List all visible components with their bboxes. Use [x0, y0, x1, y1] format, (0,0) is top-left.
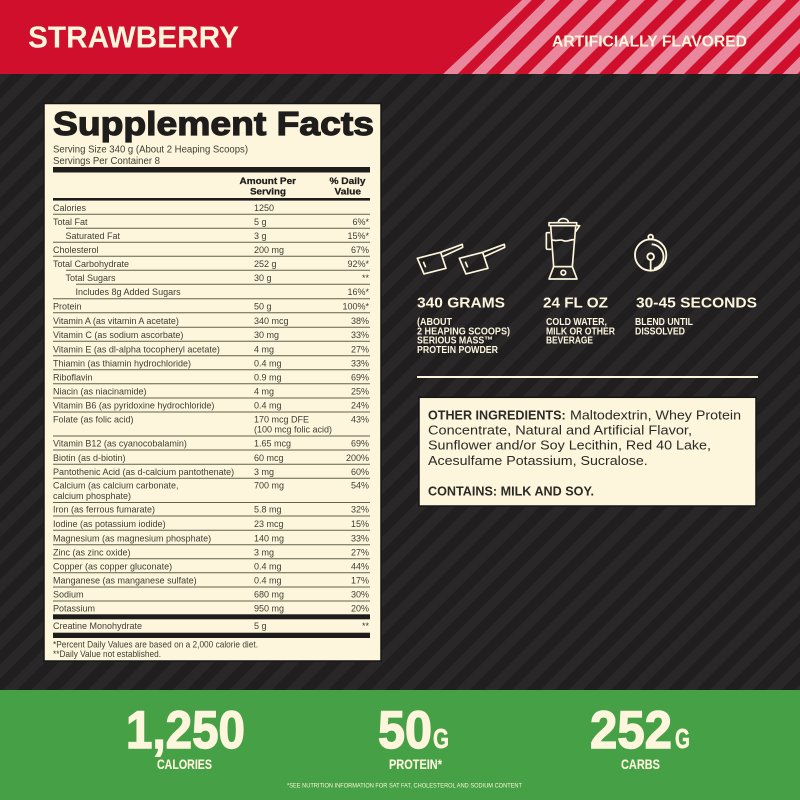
- column headers: % Daily: [330, 176, 366, 187]
- icon: timer: [635, 235, 666, 271]
- nutrient rows: 5 g: [254, 217, 267, 227]
- nutrient rows: Includes 8g Added Sugars: [76, 287, 181, 297]
- flavor name: STRAWBERRY: [28, 20, 239, 54]
- nutrient rows: Cholesterol: [53, 245, 99, 255]
- stat: calories: CALORIES: [157, 757, 212, 772]
- nutrient rows: 700 mg: [254, 481, 284, 491]
- column headers: Amount Per: [240, 176, 296, 187]
- footer band: [0, 690, 800, 800]
- nutrient rows: 0.4 mg: [254, 401, 282, 411]
- nutrient rows: 44%: [351, 561, 369, 571]
- nutrient rows: Total Fat: [53, 217, 88, 227]
- amount: liquid: 24 FL OZ: [543, 295, 608, 312]
- nutrient rows: Vitamin B6 (as pyridoxine hydrochloride): [53, 401, 214, 411]
- nutrient rows: 4 mg: [254, 387, 274, 397]
- thick rules: [53, 167, 370, 638]
- nutrient rows: 33%: [351, 533, 369, 543]
- nutrient rows: 25%: [351, 387, 369, 397]
- serving information: Serving Size 340 g (About 2 Heaping Scoops): [53, 145, 248, 156]
- nutrient rows: 950 mg: [254, 603, 284, 613]
- nutrient rows: 92%*: [347, 259, 369, 269]
- nutrient rows: Iodine (as potassium iodide): [53, 519, 166, 529]
- nutrient rows: calcium phosphate): [53, 491, 131, 501]
- nutrient rows: **: [362, 621, 369, 631]
- nutrient rows: Vitamin E (as dl-alpha tocopheryl acetate): [53, 344, 220, 354]
- amount: liquid: [543, 295, 616, 347]
- icon: two scoops: [417, 244, 505, 274]
- nutrient rows: Folate (as folic acid): [53, 414, 134, 424]
- ingredients text: Concentrate, Natural and Artificial Flavor,: [428, 423, 692, 437]
- nutrient rows: 23 mcg: [254, 519, 284, 529]
- nutrient rows: 340 mcg: [254, 316, 289, 326]
- nutrient rows: Protein: [53, 301, 82, 311]
- nutrient rows: 27%: [351, 344, 369, 354]
- ingredients text: Sunflower and/or Soy Lecithin, Red 40 Lake,: [428, 438, 711, 452]
- nutrient rows: 680 mg: [254, 590, 284, 600]
- stat: protein: [378, 701, 449, 772]
- nutrient rows: 32%: [351, 505, 369, 515]
- nutrient rows: 17%: [351, 576, 369, 586]
- serving information: [53, 145, 248, 167]
- amount: scoops: 2 HEAPING SCOOPS): [417, 326, 510, 337]
- nutrient rows: Calcium (as calcium carbonate,: [53, 481, 179, 491]
- nutrient rows: 30 g: [254, 273, 272, 283]
- column headers: Value: [334, 186, 361, 197]
- nutrient rows: 50 g: [254, 301, 272, 311]
- stat: protein: PROTEIN*: [389, 757, 443, 772]
- nutrient rows: (100 mcg folic acid): [254, 424, 332, 434]
- nutrient rows: 33%: [351, 358, 369, 368]
- nutrient rows: Vitamin A (as vitamin A acetate): [53, 316, 179, 326]
- nutrient rows: 0.4 mg: [254, 561, 282, 571]
- nutrient rows: Niacin (as niacinamide): [53, 387, 147, 397]
- nutrient rows: 15%*: [347, 231, 369, 241]
- nutrient rows: 0.4 mg: [254, 576, 282, 586]
- stat: protein: G: [433, 723, 449, 754]
- serving information: Servings Per Container 8: [53, 156, 160, 167]
- nutrient rows: 16%*: [347, 287, 369, 297]
- flavor note: ARTIFICIALLY FLAVORED: [552, 34, 747, 51]
- nutrient rows: Thiamin (as thiamin hydrochloride): [53, 358, 191, 368]
- nutrient rows: 30%: [351, 590, 369, 600]
- icon: blender: [546, 219, 580, 279]
- stat: protein: 50: [378, 701, 432, 760]
- amount: scoops: PROTEIN POWDER: [417, 345, 499, 356]
- nutrient rows: 3 mg: [254, 467, 274, 477]
- stat: carbs: G: [675, 723, 690, 754]
- nutrient rows: 30 mg: [254, 330, 279, 340]
- nutrient rows: 252 g: [254, 259, 277, 269]
- stat: carbs: 252: [590, 701, 672, 760]
- nutrient rows: Magnesium (as magnesium phosphate): [53, 533, 211, 543]
- nutrient rows: 15%: [351, 519, 369, 529]
- nutrient rows: 5.8 mg: [254, 505, 282, 515]
- nutrient rows: Total Sugars: [66, 273, 116, 283]
- panel: supplement facts: [44, 104, 381, 661]
- nutrient rows: 6%*: [352, 217, 369, 227]
- nutrient rows: 140 mg: [254, 533, 284, 543]
- nutrient rows: 54%: [351, 481, 369, 491]
- amount: scoops: 340 GRAMS: [417, 295, 505, 312]
- nutrient rows: 60 mcg: [254, 453, 284, 463]
- nutrient rows: 1.65 mcg: [254, 439, 291, 449]
- nutrient rows: Riboflavin: [53, 372, 93, 382]
- nutrient rows: Creatine Monohydrate: [53, 621, 142, 631]
- footnotes: *Percent Daily Values are based on a 2,000 calorie diet.: [53, 640, 258, 650]
- nutrient rows: 24%: [351, 401, 369, 411]
- nutrient rows: 20%: [351, 603, 369, 613]
- ingredients text: Maltodextrin, Whey Protein: [570, 408, 741, 422]
- nutrient rows: **: [362, 273, 369, 283]
- stat: calories: 1,250: [126, 701, 245, 760]
- ingredients text: Acesulfame Potassium, Sucralose.: [428, 454, 648, 468]
- nutrient rows: Manganese (as manganese sulfate): [53, 576, 197, 586]
- amount: scoops: SERIOUS MASS™: [417, 336, 493, 347]
- nutrient rows: 3 mg: [254, 547, 274, 557]
- nutrient rows: 0.9 mg: [254, 372, 282, 382]
- nutrient rows: Pantothenic Acid (as d-calcium pantothenate): [53, 467, 234, 477]
- nutrient rows: Potassium: [53, 603, 95, 613]
- column headers: Serving: [250, 186, 286, 197]
- panel: mixing directions: [417, 219, 757, 356]
- nutrient rows: 60%: [351, 467, 369, 477]
- nutrient rows: 69%: [351, 439, 369, 449]
- nutrient rows: 33%: [351, 330, 369, 340]
- amount: blend time: [635, 295, 757, 337]
- amount: scoops: [417, 295, 510, 356]
- nutrient rows: Biotin (as d-biotin): [53, 453, 126, 463]
- footnotes: **Daily Value not established.: [53, 649, 161, 659]
- nutrient rows: 67%: [351, 245, 369, 255]
- nutrient rows: [53, 203, 369, 631]
- nutrient rows: Sodium: [53, 590, 84, 600]
- allergen statement: CONTAINS: MILK AND SOY.: [428, 484, 594, 498]
- nutrient rows: 38%: [351, 316, 369, 326]
- nutrient rows: 3 g: [254, 231, 267, 241]
- ingredients text: OTHER INGREDIENTS:: [428, 408, 566, 422]
- amount: liquid: BEVERAGE: [546, 336, 593, 347]
- nutrient rows: 5 g: [254, 621, 267, 631]
- nutrient rows: 200%: [346, 453, 369, 463]
- nutrient rows: 1250: [254, 203, 274, 213]
- panel: other ingredients: [419, 397, 756, 506]
- amount: liquid: MILK OR OTHER: [546, 326, 616, 337]
- amount: liquid: COLD WATER,: [546, 317, 607, 328]
- nutrient rows: Saturated Fat: [66, 231, 121, 241]
- nutrient rows: 4 mg: [254, 344, 274, 354]
- nutrient rows: 100%*: [342, 301, 369, 311]
- amount: scoops: (ABOUT: [417, 317, 452, 328]
- heading: Supplement Facts: [53, 105, 374, 142]
- amount: blend time: 30-45 SECONDS: [636, 295, 757, 312]
- nutrient rows: Calories: [53, 203, 87, 213]
- nutrient rows: 43%: [351, 414, 369, 424]
- nutrient rows: 170 mcg DFE: [254, 414, 309, 424]
- dark striped background: [0, 74, 800, 690]
- stat: carbs: CARBS: [621, 757, 660, 772]
- header band: [0, 0, 800, 74]
- footnote: *SEE NUTRITION INFORMATION FOR SAT FAT, CHOLESTEROL AND SODIUM CONTENT: [287, 782, 522, 790]
- amount: blend time: BLEND UNTIL: [635, 317, 693, 328]
- amount: blend time: DISSOLVED: [635, 326, 685, 337]
- nutrient rows: 200 mg: [254, 245, 284, 255]
- column headers: [240, 176, 366, 197]
- ingredients text: [428, 408, 741, 468]
- row rules: [53, 214, 370, 601]
- footnotes: [53, 640, 258, 659]
- nutrient rows: Vitamin C (as sodium ascorbate): [53, 330, 183, 340]
- nutrient rows: Copper (as copper gluconate): [53, 561, 172, 571]
- nutrient rows: Vitamin B12 (as cyanocobalamin): [53, 439, 187, 449]
- nutrient rows: 0.4 mg: [254, 358, 282, 368]
- nutrient rows: Zinc (as zinc oxide): [53, 547, 131, 557]
- nutrient rows: Iron (as ferrous fumarate): [53, 505, 155, 515]
- nutrient rows: 27%: [351, 547, 369, 557]
- nutrient rows: 69%: [351, 372, 369, 382]
- nutrient rows: Total Carbohydrate: [53, 259, 129, 269]
